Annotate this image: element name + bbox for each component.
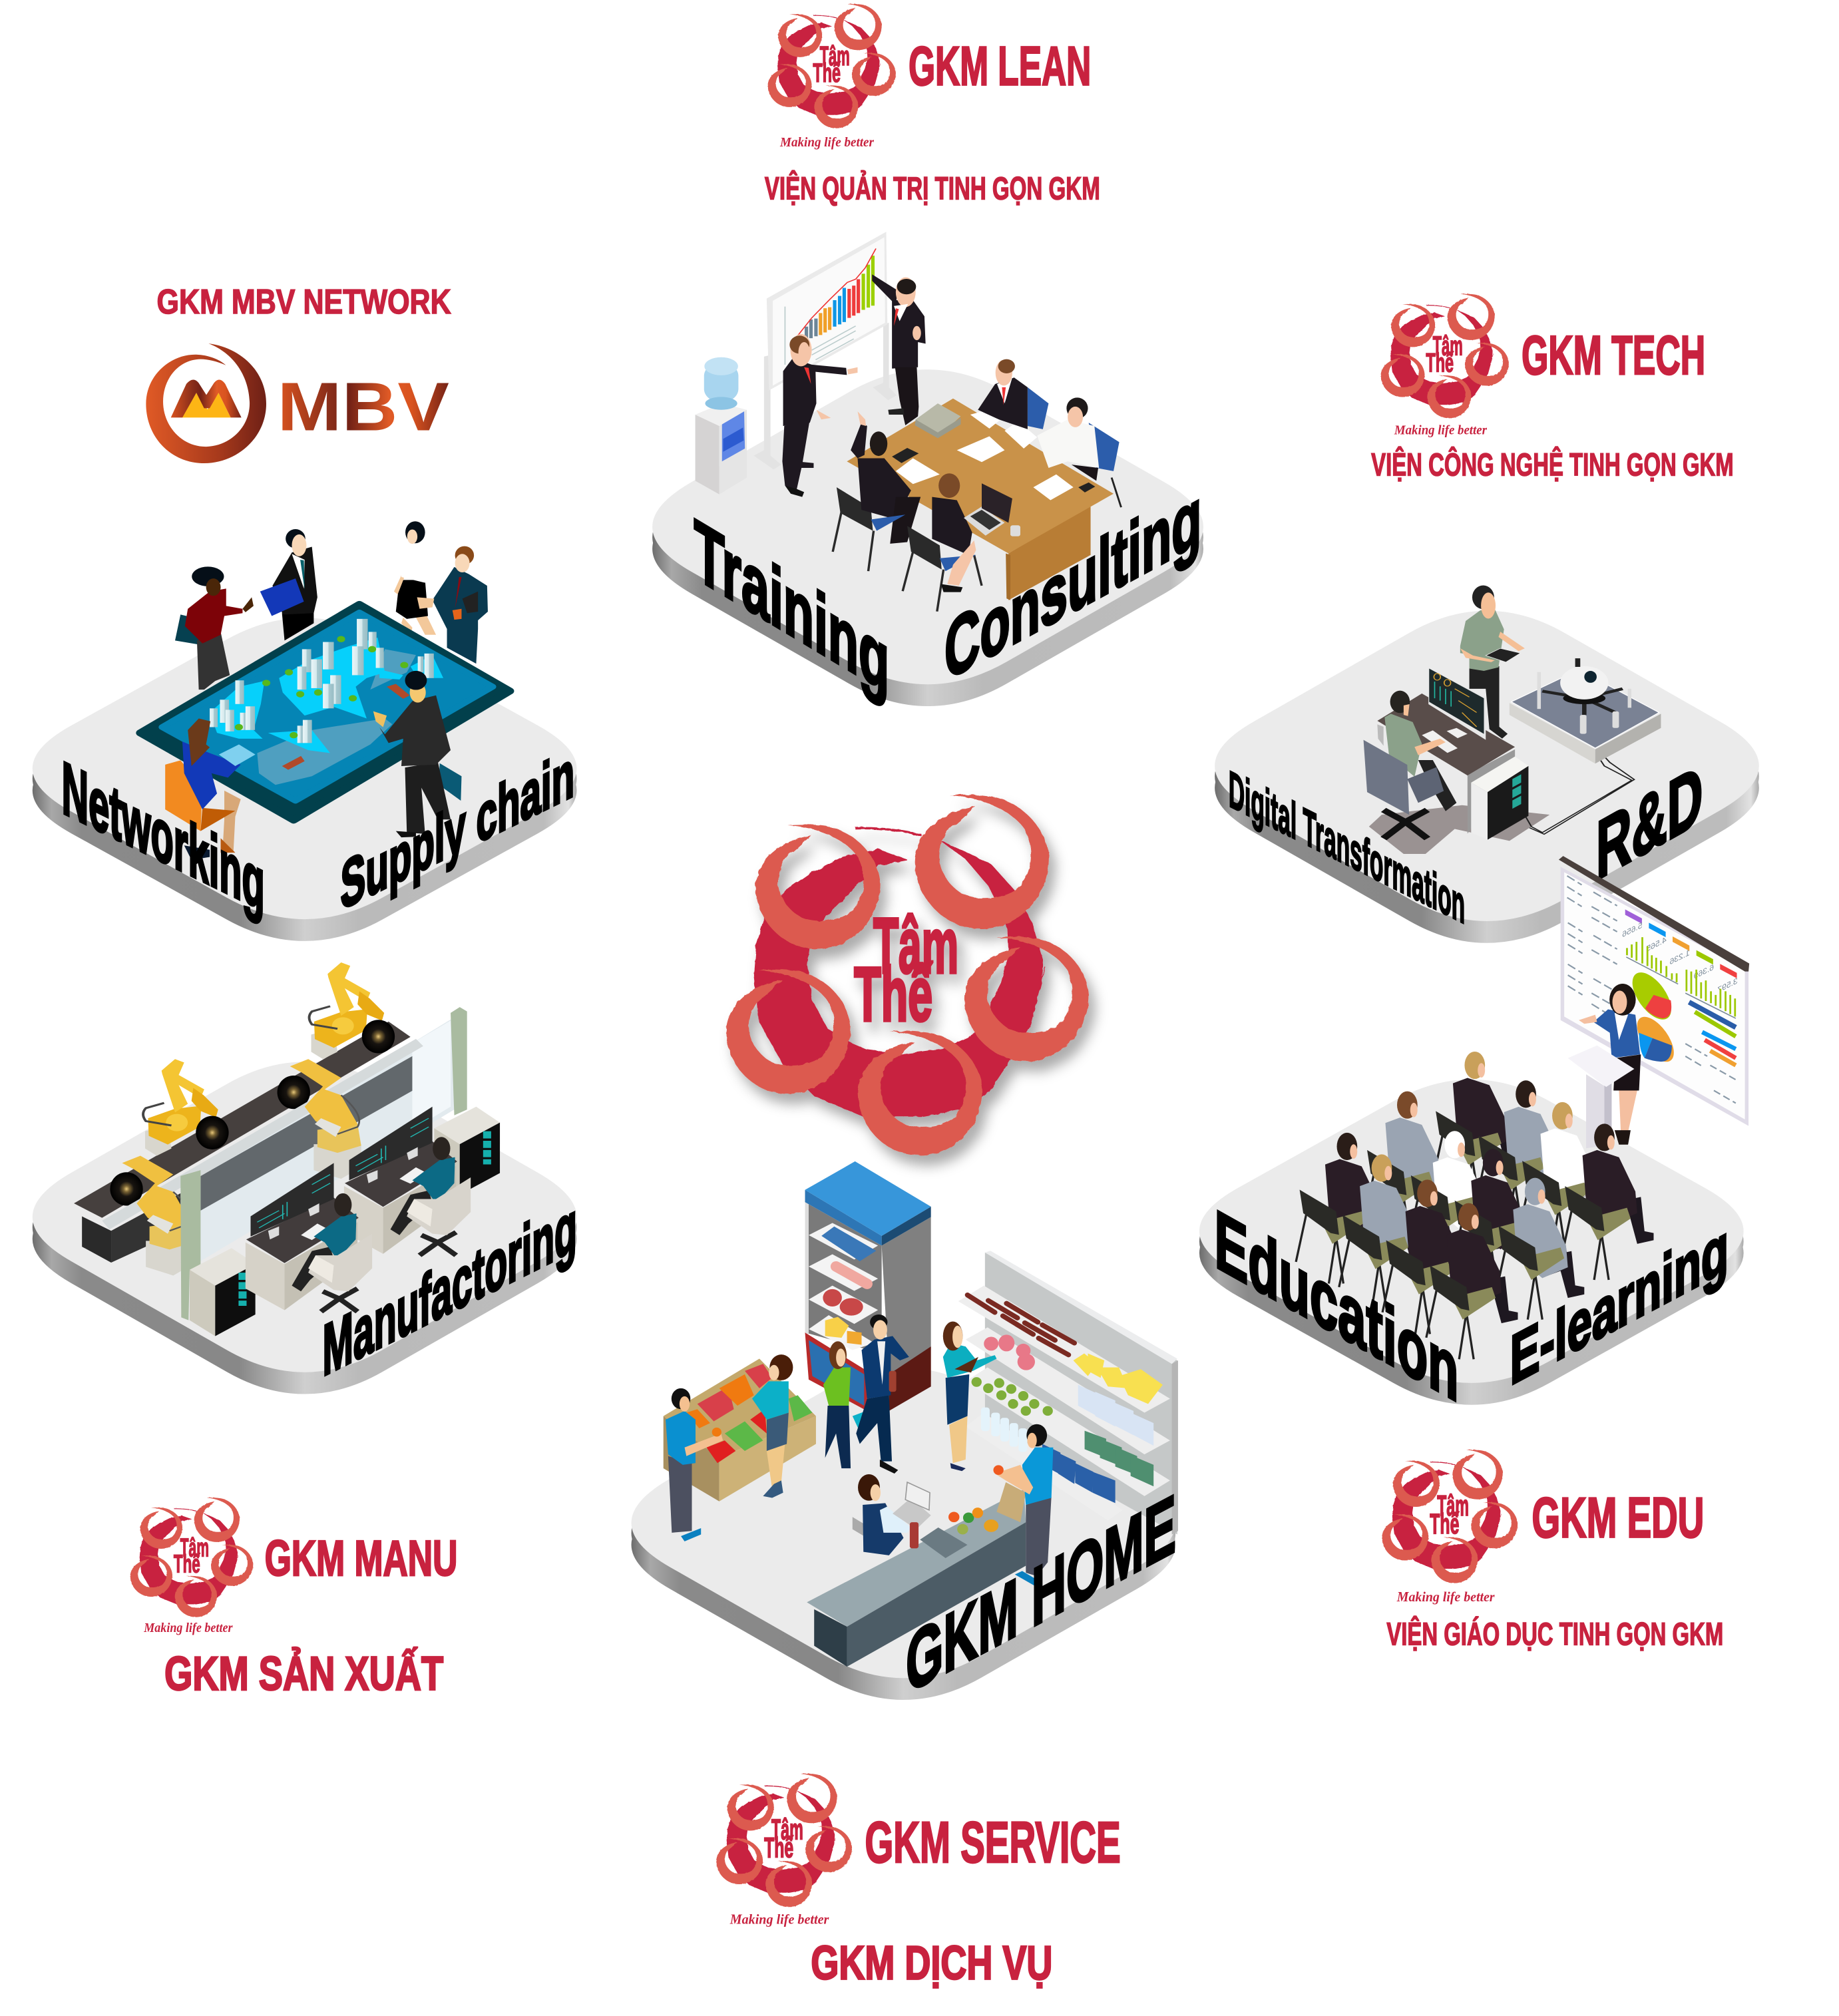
- logo: GKM Lean: [767, 4, 896, 128]
- illustration: R&D lab: [1364, 585, 1661, 854]
- panel: digital transformation and R&D: Digital Transformation: [1229, 760, 1465, 935]
- logo: GKM Service: [716, 1774, 852, 1907]
- heading: GKM EDU: GKM EDU: [1532, 1486, 1704, 1549]
- logo: GKM Manu: [130, 1498, 253, 1617]
- heading: GKM TECH: GKM TECH: [1522, 324, 1705, 386]
- logo: GKM Tech: [1380, 294, 1509, 418]
- panel: networking and supply chain: [33, 521, 576, 941]
- heading: GKM LEAN: GKM LEAN: [909, 35, 1091, 97]
- label: Consulting: Consulting: [944, 469, 1201, 699]
- central logo: Tâm Thế: [726, 795, 1089, 1155]
- label: Networking: Networking: [62, 745, 265, 928]
- logo: GKM Edu: [1382, 1450, 1518, 1583]
- label: R&D: R&D: [1596, 747, 1703, 899]
- illustration: classroom and projection screen: 5.656: [1622, 920, 1642, 939]
- illustration: classroom and projection screen: 4.565: [1647, 934, 1667, 954]
- subheading: GKM Dịch Vụ: GKM DỊCH VỤ: [811, 1937, 1052, 1990]
- heading: GKM MBV NETWORK: GKM MBV NETWORK: [157, 283, 451, 321]
- tagline: Making life better (Service): Making life better: [729, 1911, 829, 1927]
- panel: education and e-learning: [1199, 856, 1749, 1420]
- illustration: factory line: [74, 962, 500, 1336]
- label: Education: Education: [1215, 1192, 1458, 1420]
- illustration: classroom and projection screen: 3.597: [1717, 976, 1738, 995]
- label: Training: Training: [694, 501, 889, 713]
- illustration: meeting room: [696, 232, 1121, 612]
- platform: [33, 618, 576, 941]
- platform: [1215, 611, 1759, 943]
- platform: [632, 1368, 1175, 1700]
- panel: digital transformation and R&D: [1215, 585, 1759, 943]
- heading: GKM MANU: GKM MANU: [265, 1530, 457, 1586]
- panel: training and consulting: [652, 232, 1203, 713]
- platform: [652, 369, 1203, 706]
- illustration: grocery store: [664, 1161, 1178, 1667]
- logo: MBV: [146, 343, 449, 463]
- panel: manufacturing: [33, 962, 577, 1394]
- subheading: GKM Sản Xuất: GKM SẢN XUẤT: [164, 1647, 443, 1701]
- subheading: Viện Quản Trị: VIỆN QUẢN TRỊ TINH GỌN GKM: [765, 170, 1100, 206]
- label: GKM HOME: GKM HOME: [906, 1477, 1176, 1711]
- illustration: map table with people: [140, 521, 510, 860]
- illustration: classroom and projection screen: 1.236: [1670, 947, 1690, 966]
- panel: GKM Home: [632, 1161, 1178, 1711]
- label: Manufactoring: Manufactoring: [323, 1185, 577, 1392]
- heading: GKM SERVICE: GKM SERVICE: [865, 1810, 1121, 1875]
- illustration: classroom and projection screen: [1296, 856, 1749, 1359]
- tagline: Making life better (Tech): Making life better: [1394, 423, 1488, 438]
- tagline: Making life better (Edu): Making life better: [1396, 1589, 1495, 1605]
- tagline: Making life better (Manu): Making life better: [143, 1621, 233, 1635]
- illustration: classroom and projection screen: 6.369: [1694, 962, 1714, 981]
- platform: [33, 1062, 576, 1394]
- platform: [1199, 1080, 1744, 1405]
- label: Supply chain: Supply chain: [341, 735, 574, 924]
- tagline: Making life better (Lean): Making life better: [779, 135, 875, 150]
- logo: MBV: MBV: [278, 368, 449, 445]
